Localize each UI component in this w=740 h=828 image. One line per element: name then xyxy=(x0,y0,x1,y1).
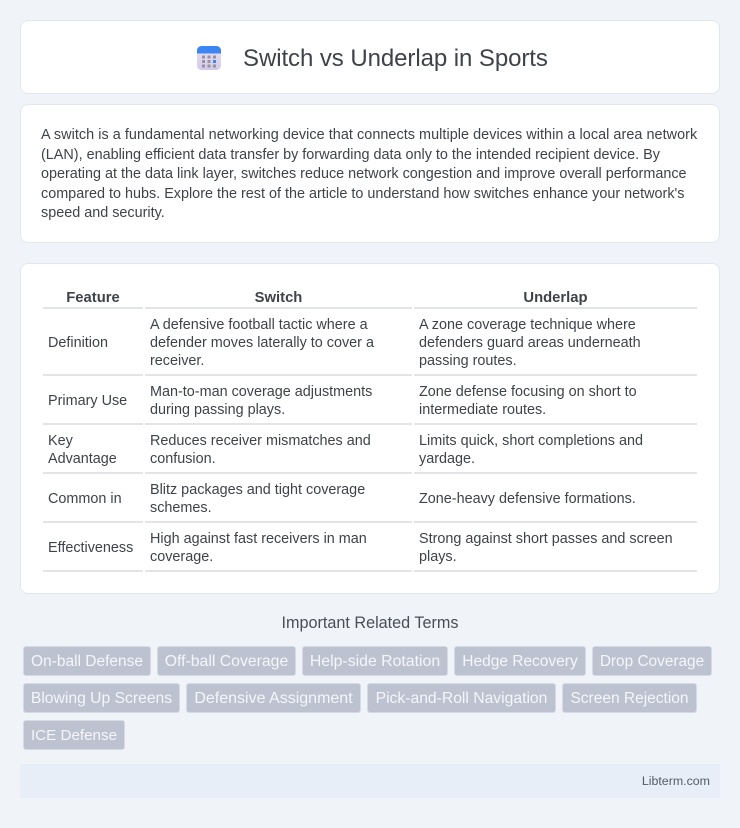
comparison table panel: Man-to-man coverage adjustments xyxy=(150,384,372,400)
icon: calendar grid xyxy=(197,46,221,70)
related term tags xyxy=(23,646,712,750)
comparison table panel: defenders guard areas underneath xyxy=(419,335,641,351)
intro text: (LAN), enabling efficient data transfer by forwarding data only to the intended recipient device. By xyxy=(41,146,660,162)
intro text xyxy=(41,127,698,221)
header card xyxy=(20,20,720,94)
related term tags: Drop Coverage xyxy=(600,653,704,670)
comparison table panel: receiver. xyxy=(150,353,204,369)
comparison table panel: confusion. xyxy=(150,451,216,467)
comparison table panel: A defensive football tactic where a xyxy=(150,317,368,333)
table header: switch: Switch xyxy=(255,290,302,306)
intro text: operating at the data link layer, switches reduce network congestion and improve overall performance xyxy=(41,166,687,182)
footer source: Libterm.com xyxy=(642,774,710,788)
comparison table panel: yardage. xyxy=(419,451,475,467)
related term tags: Blowing Up Screens xyxy=(31,690,172,707)
row: key advantage: Key xyxy=(48,433,73,449)
comparison table panel: during passing plays. xyxy=(150,402,285,418)
comparison table panel: plays. xyxy=(419,549,457,565)
intro text: compared to hubs. Explore the rest of the article to understand how switches enhance your network's xyxy=(41,186,684,202)
title: Switch vs Underlap in Sports xyxy=(243,45,548,72)
comparison table panel: schemes. xyxy=(150,500,212,516)
comparison table panel: Blitz packages and tight coverage xyxy=(150,482,365,498)
row: key advantage xyxy=(48,433,117,467)
row: primary use: Primary Use xyxy=(48,393,127,409)
intro panel xyxy=(20,104,720,243)
comparison table panel: Zone-heavy defensive formations. xyxy=(419,491,636,507)
comparison table panel: Limits quick, short completions and xyxy=(419,433,643,449)
comparison table panel: High against fast receivers in man xyxy=(150,531,367,547)
intro text: speed and security. xyxy=(41,205,165,221)
row: common in: Common in xyxy=(48,491,122,507)
comparison table panel: Zone defense focusing on short to xyxy=(419,384,637,400)
comparison table panel: passing routes. xyxy=(419,353,517,369)
comparison table panel: intermediate routes. xyxy=(419,402,546,418)
comparison table panel: A zone coverage technique where xyxy=(419,317,636,333)
table header: feature: Feature xyxy=(66,290,120,306)
related terms heading: Important Related Terms xyxy=(282,614,458,632)
intro text: A switch is a fundamental networking device that connects multiple devices within a local area network xyxy=(41,127,697,143)
comparison table panel: defender moves laterally to cover a xyxy=(150,335,374,351)
related term tags: ICE Defense xyxy=(31,727,117,744)
comparison table panel xyxy=(20,263,720,594)
related term tags: Help-side Rotation xyxy=(310,653,440,670)
comparison table panel: coverage. xyxy=(150,549,213,565)
related term tags: Pick-and-Roll Navigation xyxy=(376,690,547,707)
row: key advantage: Advantage xyxy=(48,451,117,467)
table header: underlap: Underlap xyxy=(523,290,588,306)
related term tags: Defensive Assignment xyxy=(194,690,353,707)
related term tags: Hedge Recovery xyxy=(462,653,578,670)
comparison table panel: Strong against short passes and screen xyxy=(419,531,673,547)
related term tags: Off-ball Coverage xyxy=(165,653,288,670)
related term tags: On-ball Defense xyxy=(31,653,143,670)
row: effectiveness: Effectiveness xyxy=(48,540,133,556)
comparison table panel: Reduces receiver mismatches and xyxy=(150,433,371,449)
footer bar xyxy=(20,764,720,798)
row: definition: Definition xyxy=(48,335,108,351)
related term tags: Screen Rejection xyxy=(570,690,689,707)
